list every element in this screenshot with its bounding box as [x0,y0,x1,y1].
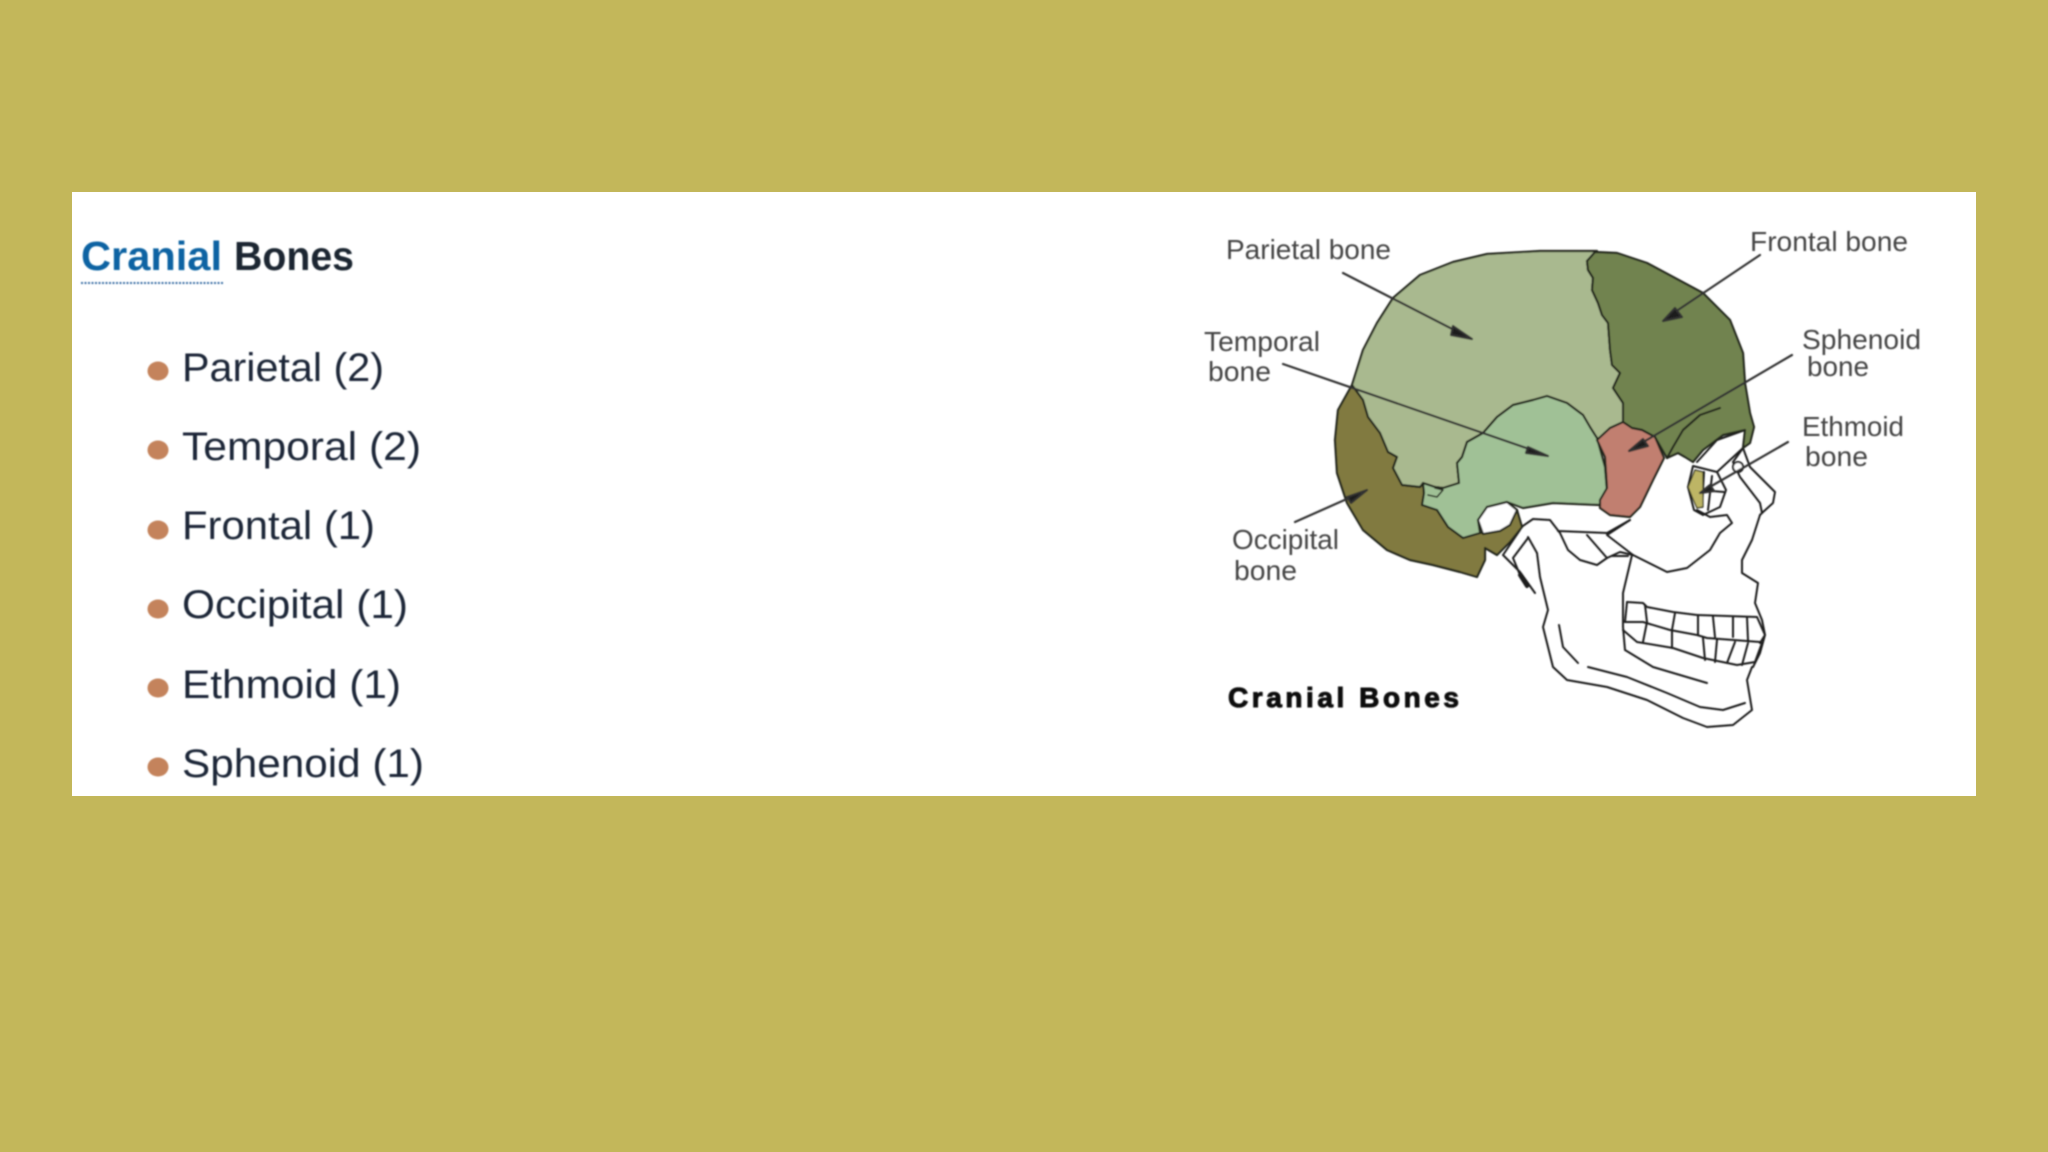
list item: Temporal: Temporal (2) [182,425,421,469]
diagram caption: Cranial Bones [1228,682,1459,713]
label: occipital bone: bone [1234,555,1297,586]
bone: ethmoid [1688,470,1703,508]
label: temporal bone: Temporal [1204,326,1320,357]
list: cranial bones with counts [148,346,424,786]
label: temporal bone [1204,326,1320,387]
arrow: sphenoid bone [1629,355,1792,451]
diagram labels [1204,226,1921,586]
heading: Cranial Bones: Cranial [81,233,222,279]
arrow: frontal bone [1663,255,1760,321]
label: ethmoid bone [1802,411,1904,472]
arrow: ethmoid bone [1700,442,1788,493]
list item: Ethmoid: Ethmoid (1) [182,663,401,707]
list item: Occipital: Occipital (1) [182,583,408,627]
arrow: occipital bone [1295,490,1367,522]
arrow: parietal bone [1343,273,1472,339]
heading: Cranial Bones [81,233,354,283]
diagram: skull with labelled cranial bones [1204,226,1921,727]
list item: Sphenoid: Sphenoid (1) [182,742,424,786]
label: parietal bone: Parietal bone [1226,234,1391,265]
list item: Frontal: Frontal (1) [182,504,375,548]
heading: Cranial Bones: Bones [234,233,354,279]
bone: parietal [1352,251,1624,488]
arrow: temporal bone [1283,364,1548,456]
list item: Parietal: Parietal (2) [182,346,384,390]
ear canal opening [1478,502,1517,534]
bone: frontal [1587,252,1754,462]
label: sphenoid bone [1802,324,1921,382]
label: sphenoid bone: bone [1807,351,1869,382]
bone: sphenoid [1597,422,1664,517]
label: occipital bone: Occipital [1232,524,1339,555]
icon: facial bones and mandible [1503,430,1775,727]
panel: white content card [72,192,1976,796]
label: temporal bone: bone [1208,356,1271,387]
bone: occipital [1335,385,1522,577]
label: occipital bone [1232,524,1339,586]
label: sphenoid bone: Sphenoid [1802,324,1921,355]
label: ethmoid bone: bone [1805,441,1868,472]
bone: temporal [1422,396,1607,538]
skull drawing [1283,251,1792,727]
label: ethmoid bone: Ethmoid [1802,411,1904,442]
icon: teeth [1623,602,1765,665]
label: frontal bone: Frontal bone [1750,226,1908,257]
